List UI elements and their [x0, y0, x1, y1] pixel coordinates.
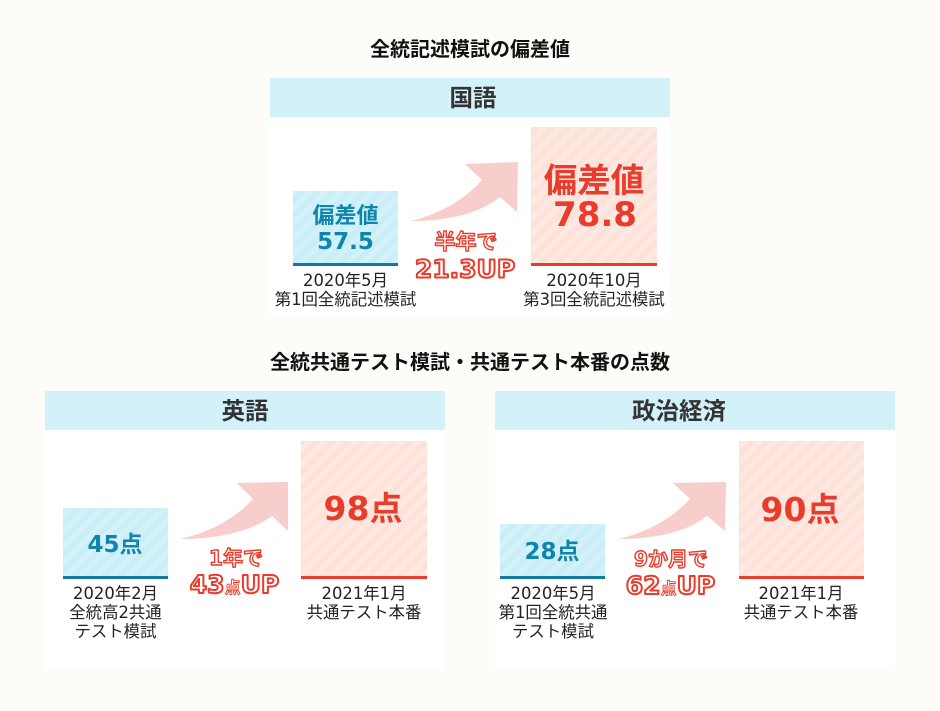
caption: 全統高2共通テスト模試: 2020年2月	[73, 584, 158, 603]
panel: 政治経済	[495, 391, 895, 670]
title: 全統記述模試の偏差値: 全統記述模試の偏差値	[370, 37, 570, 61]
panel: 英語	[45, 391, 445, 670]
bar: 2020年5月 28点	[500, 524, 605, 579]
caption: 共通テスト本番: 共通テスト本番	[307, 603, 421, 622]
arrow: up	[411, 162, 518, 221]
bar: 2020年5月 28点: 28点	[524, 539, 580, 565]
bar: 2020年10月 偏差値78.8	[531, 127, 657, 266]
bar: 2020年2月 45点: 45点	[87, 532, 143, 558]
panel header: 国語: 国語	[450, 84, 496, 112]
panel: 国語	[270, 78, 670, 318]
caption: 共通テスト本番: 2021年1月	[759, 584, 843, 603]
panel header: 国語	[270, 78, 670, 117]
caption: 全統高2共通テスト模試: テスト模試	[75, 622, 156, 641]
panel header: 英語: 英語	[222, 397, 268, 425]
bar: 2021年1月 98点: 98点	[324, 489, 402, 528]
caption: 第3回全統記述模試: 2020年10月	[546, 271, 642, 290]
bar: 2021年1月 90点	[739, 441, 864, 579]
callout: 9か月で62点UP: 点UP	[661, 571, 715, 600]
callout: 1年で43点UP: 1年で	[209, 546, 263, 570]
callout: 半年で21.3UP: 半年で	[434, 230, 498, 254]
caption: 第1回全統共通テスト模試: テスト模試	[512, 622, 594, 641]
arrow: up	[618, 482, 726, 539]
callout: 1年で43点UP: 43	[190, 570, 225, 599]
bar: 2020年10月 偏差値78.8: 78.8	[553, 195, 637, 235]
bar: 2021年1月 90点: 90点	[761, 490, 839, 529]
arrow: up	[180, 482, 288, 539]
bar: 2020年10月 偏差値78.8: 偏差値	[544, 161, 644, 200]
callout: 1年で43点UP: 点UP	[225, 570, 279, 599]
callout: 9か月で62点UP: 9か月で	[634, 547, 708, 571]
panel header: 政治経済	[495, 391, 895, 430]
bar: 2020年2月 45点	[63, 508, 168, 579]
caption: 共通テスト本番: 共通テスト本番	[744, 603, 858, 622]
caption: 全統高2共通テスト模試: 全統高2共通	[69, 603, 162, 622]
caption: 第1回全統記述模試: 2020年5月	[303, 271, 388, 290]
bar: 2020年5月 偏差値57.5	[293, 191, 398, 266]
panel header: 政治経済: 政治経済	[632, 397, 726, 425]
title: 全統共通テスト模試・共通テスト本番の点数: 全統共通テスト模試・共通テスト本番の点数	[270, 350, 670, 374]
caption: 第1回全統共通テスト模試: 2020年5月	[511, 584, 595, 603]
caption: 第3回全統記述模試: 第3回全統記述模試	[523, 290, 665, 309]
callout: 半年で21.3UP: 21.3UP	[415, 254, 515, 284]
caption: 第1回全統記述模試: 第1回全統記述模試	[275, 290, 416, 309]
bar: 2021年1月 98点	[301, 441, 427, 579]
caption: 第1回全統共通テスト模試: 第1回全統共通	[499, 603, 607, 622]
bar: 2020年5月 偏差値57.5: 57.5	[317, 229, 374, 255]
bar: 2020年5月 偏差値57.5: 偏差値	[312, 204, 379, 229]
caption: 共通テスト本番: 2021年1月	[322, 584, 406, 603]
panel header: 英語	[45, 391, 445, 430]
callout: 9か月で62点UP: 62	[626, 571, 661, 600]
